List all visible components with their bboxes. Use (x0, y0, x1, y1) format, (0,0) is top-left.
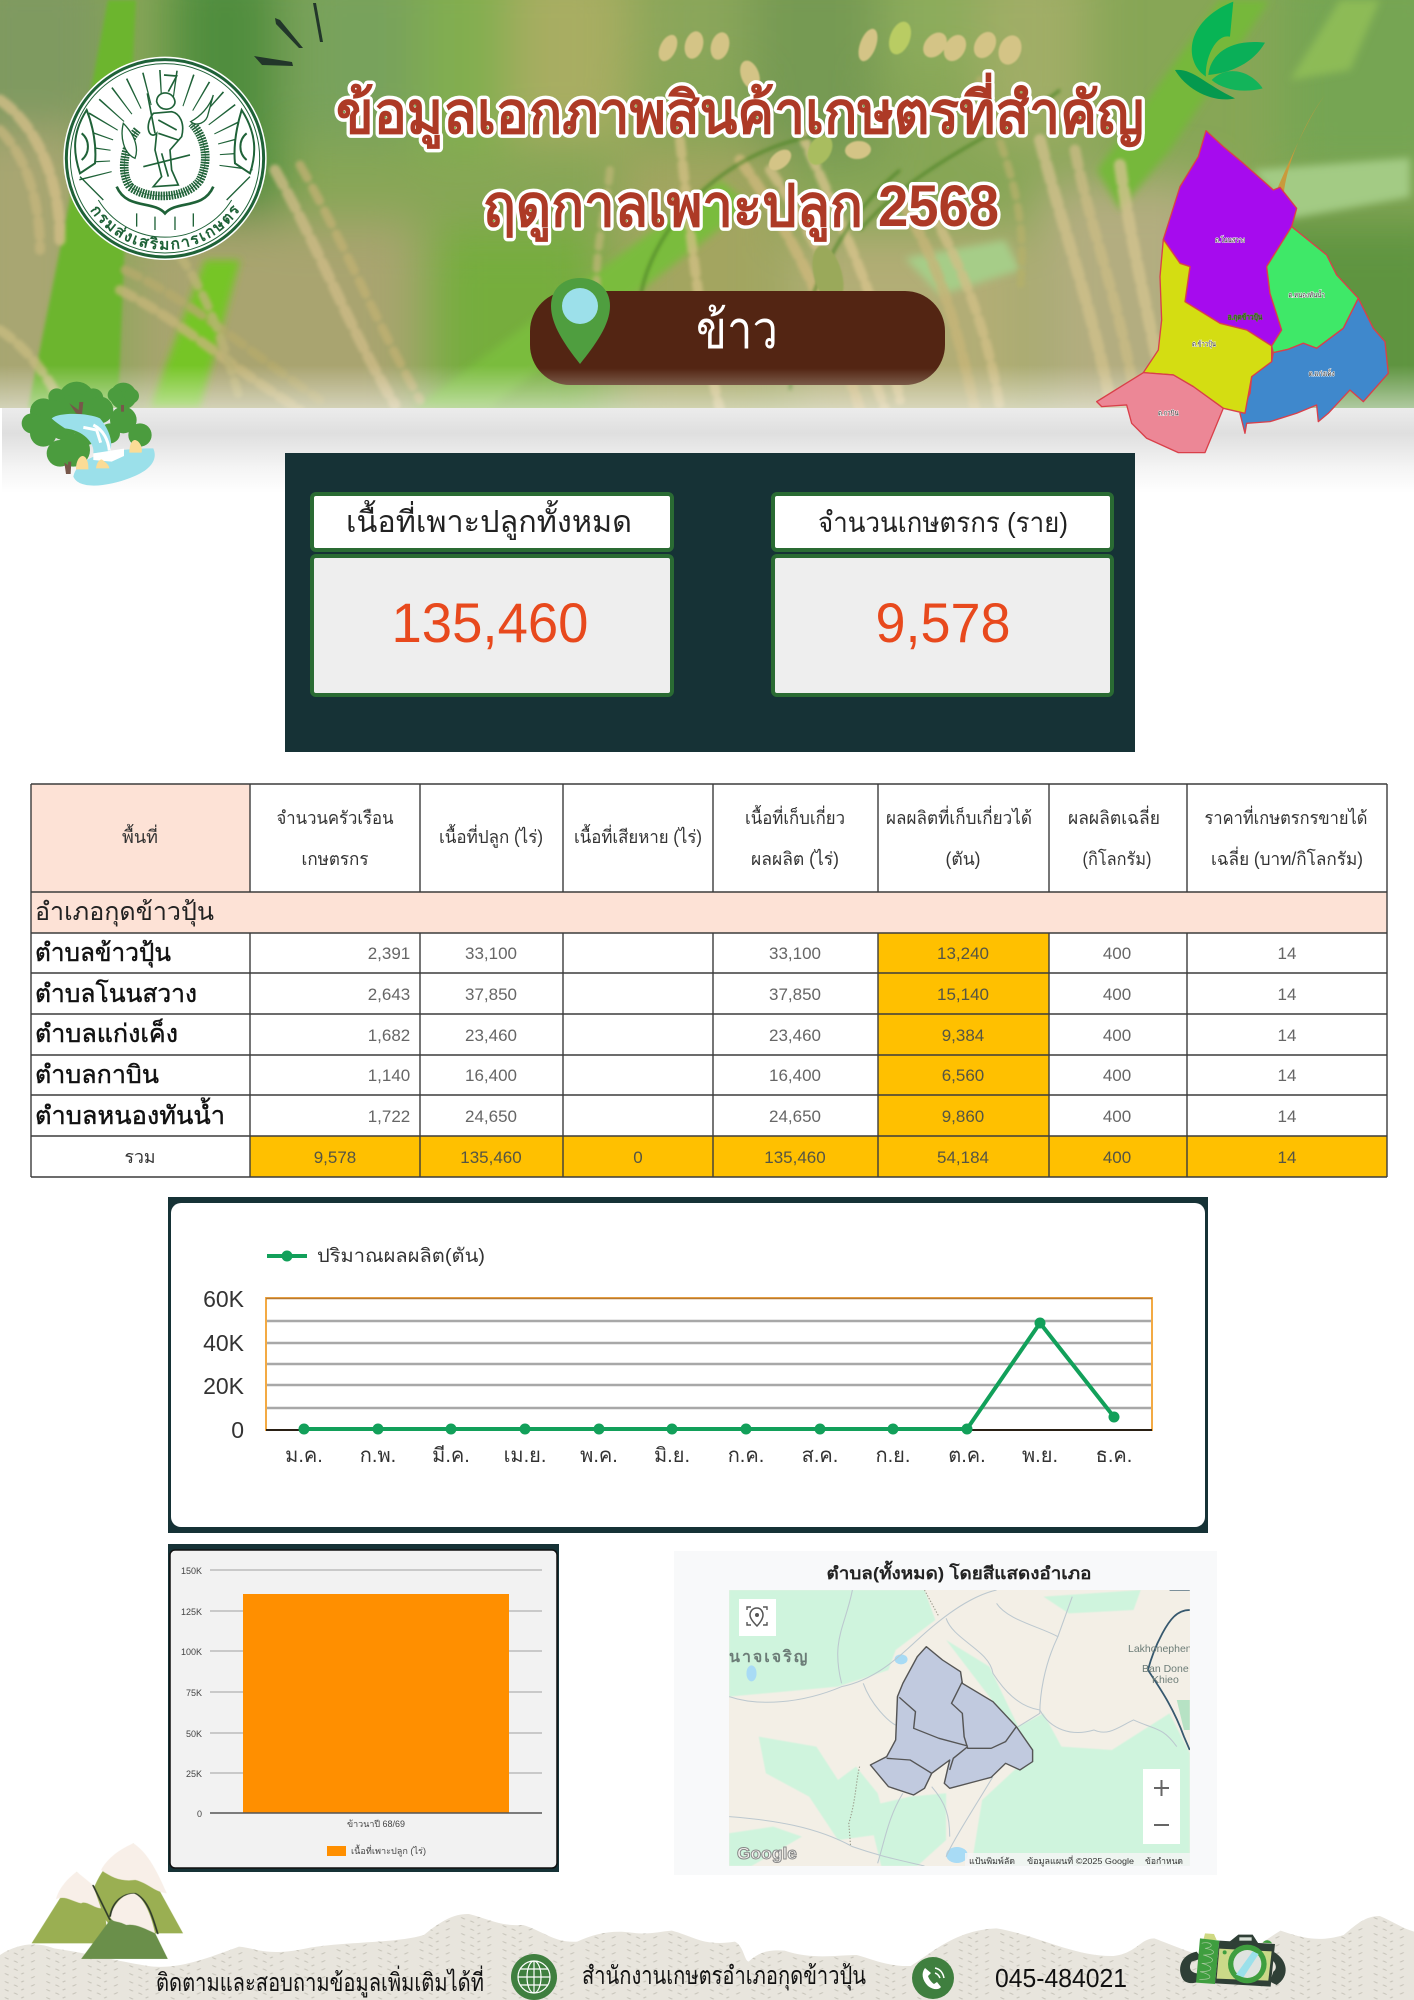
table values: 16,400 (465, 1066, 517, 1085)
table values: 37,850 (769, 985, 821, 1004)
footer: phone number: 045-484021 (995, 1963, 1127, 1993)
stat card: number of farmers (773, 494, 1112, 695)
icon: location pin (551, 278, 610, 364)
table row labels: ตำบลข้าวปุ้น (35, 939, 171, 968)
table values: 14 (1278, 985, 1296, 1004)
table values: 9,860 (942, 1107, 984, 1126)
chart line series (298, 1318, 1120, 1434)
map attribution (965, 1853, 1190, 1867)
map place labels: Ban Done (1142, 1663, 1189, 1675)
table values: 24,650 (769, 1107, 821, 1126)
stat card: total planted area: 135,460 (392, 591, 588, 654)
table values: 14 (1278, 1026, 1296, 1045)
footer: office name: สำนักงานเกษตรอำเภอกุดข้าวปุ้น (582, 1962, 866, 1991)
table values: 400 (1103, 1026, 1131, 1045)
chart month labels: ธ.ค. (1096, 1445, 1132, 1467)
chart month labels: ส.ค. (802, 1445, 838, 1467)
map: Kut Khaopun district subdistricts: ต.หนองทันน้ำ (1288, 290, 1325, 300)
table values: 13,240 (937, 944, 989, 963)
grey shaded band below photo (2, 408, 1414, 493)
table column headers: ผลผลิตที่เก็บเกี่ยวได้ (886, 805, 1032, 828)
table values: 0 (633, 1148, 643, 1167)
chart month labels: พ.ย. (1022, 1445, 1058, 1467)
table column headers: พื้นที่ (122, 824, 158, 847)
table values: 37,850 (465, 985, 517, 1004)
table values: 9,384 (942, 1026, 984, 1045)
bar chart axis labels (181, 1566, 202, 1819)
table values: 1,682 (368, 1026, 410, 1045)
panel: line chart monthly yield (168, 1197, 1208, 1533)
bar chart legend: เนื้อที่เพาะปลูก (ไร่) (351, 1844, 426, 1857)
table column headers: ราคาที่เกษตรกรขายได้ (1204, 805, 1368, 828)
table values: 14 (1278, 1066, 1296, 1085)
panel: summary statistics (285, 453, 1135, 752)
table column headers: เกษตรกร (302, 849, 369, 869)
map: Kut Khaopun district subdistricts (1097, 94, 1388, 453)
table values: 1,140 (368, 1066, 410, 1085)
table values: 1,722 (368, 1107, 410, 1126)
table values: 16,400 (769, 1066, 821, 1085)
table values: 23,460 (465, 1026, 517, 1045)
table column headers: เนื้อที่ปลูก (ไร่) (439, 824, 543, 848)
map: Kut Khaopun district subdistricts: ต.โนนสวาง (1215, 236, 1245, 245)
map attribution: ข้อมูลแผนที่ ©2025 Google (1027, 1855, 1134, 1867)
commodity label pill (530, 291, 945, 385)
bar chart axis labels: 75K (186, 1688, 202, 1698)
chart y axis labels: 0 (231, 1417, 244, 1443)
table values: 33,100 (769, 944, 821, 963)
map base (729, 1590, 1198, 1866)
map: Kut Khaopun district subdistricts: ต.แก่งเค็ง (1309, 368, 1335, 378)
title: two line heading (336, 72, 1144, 242)
table values: 135,460 (460, 1148, 522, 1167)
table values: 15,140 (937, 985, 989, 1004)
google logo: Google (737, 1844, 797, 1863)
icon: decorative black ticks (254, 3, 323, 66)
table column headers: เฉลี่ย (บาท/กิโลกรัม) (1211, 846, 1363, 869)
table values: 14 (1278, 1148, 1296, 1167)
table values: 400 (1103, 944, 1131, 963)
map: Kut Khaopun district subdistricts: ต.ข้าวปุ้น (1192, 340, 1216, 349)
panel: bar chart planted area (168, 1544, 559, 1872)
footer: hills background (0, 1914, 1414, 2000)
table values: 400 (1103, 1066, 1131, 1085)
chart y axis labels: 60K (203, 1286, 245, 1312)
table values (314, 944, 1296, 1167)
logo: Department of Agricultural Extension seal (63, 56, 267, 260)
logo: Department of Agricultural Extension seal: กรมส่งเสริมการเกษตร (90, 205, 239, 250)
table values: 2,643 (368, 985, 410, 1004)
table values: 6,560 (942, 1066, 984, 1085)
commodity label pill: ข้าว (696, 302, 778, 360)
header photo: rice field (0, 0, 1414, 450)
table row labels: ตำบลแก่งเค็ง (35, 1018, 178, 1048)
table values: 33,100 (465, 944, 517, 963)
stat card: number of farmers: 9,578 (876, 591, 1010, 654)
map district polygon (870, 1647, 1033, 1795)
table values: 135,460 (764, 1148, 826, 1167)
map place labels (730, 1644, 1190, 1683)
chart y axis labels: 40K (203, 1330, 245, 1356)
table column headers: ผลผลิต (ไร่) (751, 848, 839, 869)
bar chart axis labels: 100K (181, 1647, 202, 1657)
map attribution: ข้อกำหนด (1145, 1856, 1183, 1866)
panel: Google map (729, 1560, 1190, 1866)
chart month labels: ก.พ. (360, 1445, 396, 1467)
map place labels: นาจเจริญ (729, 1648, 809, 1667)
table values: 23,460 (769, 1026, 821, 1045)
table values: 14 (1278, 1107, 1296, 1126)
table column headers: จำนวนครัวเรือน (276, 808, 394, 828)
bar chart category label: ข้าวนาปี 68/69 (347, 1819, 405, 1829)
map attribution: แป้นพิมพ์ลัด (969, 1856, 1015, 1866)
table values: 400 (1103, 985, 1131, 1004)
bar chart axis labels: 0 (197, 1809, 202, 1819)
icon: phone (912, 1957, 954, 1999)
title: two line heading: ข้อมูลเอกภาพสินค้าเกษตรที่สำคัญ (336, 72, 1144, 149)
map location control (739, 1599, 776, 1636)
chart month labels: มิ.ย. (654, 1445, 690, 1467)
table row labels: ตำบลโนนสวาง (35, 979, 197, 1008)
table row labels: ตำบลหนองทันน้ำ (35, 1097, 225, 1130)
chart gridlines (266, 1298, 1152, 1430)
icon: camera (1180, 1933, 1286, 1987)
table values: 400 (1103, 1148, 1131, 1167)
title: two line heading: ฤดูกาลเพาะปลูก 2568 (483, 174, 999, 242)
stat card: number of farmers: จำนวนเกษตรกร (ราย) (818, 507, 1068, 538)
table column headers: (ตัน) (946, 849, 980, 869)
chart month labels: มี.ค. (432, 1445, 470, 1467)
map: Kut Khaopun district subdistricts: ต.กาบิน (1158, 408, 1179, 417)
footer: follow-up text: ติดตามและสอบถามข้อมูลเพิ่มเติมได้ที่ (156, 1965, 484, 1998)
icon: globe (511, 1954, 557, 2000)
map: Kut Khaopun district subdistricts: อ.กุดข้าวปุ้น (1228, 312, 1262, 321)
table values: 14 (1278, 944, 1296, 963)
table row labels: รวม (124, 1147, 156, 1167)
chart month labels: ต.ค. (948, 1445, 986, 1467)
icon: snowy mountains (32, 1843, 183, 1959)
table values: 24,650 (465, 1107, 517, 1126)
table column headers (122, 805, 1368, 869)
chart month labels: ก.ค. (728, 1445, 764, 1467)
chart month labels (285, 1445, 1132, 1467)
chart month labels: ก.ย. (876, 1445, 910, 1467)
bar chart axis labels: 50K (186, 1729, 202, 1739)
table values: 54,184 (937, 1148, 989, 1167)
table column headers: เนื้อที่เก็บเกี่ยว (745, 805, 845, 828)
chart y axis labels (203, 1286, 245, 1443)
table column headers: (กิโลกรัม) (1082, 848, 1152, 869)
map place labels: Lakhonepheng (1128, 1643, 1198, 1655)
chart legend: ปริมาณผลผลิต(ตัน) (317, 1246, 485, 1267)
table row labels (35, 898, 225, 1167)
map title: ตำบล(ทั้งหมด) โดยสีแสดงอำเภอ (826, 1560, 1092, 1583)
bar chart axis labels: 150K (181, 1566, 202, 1576)
stat card: total planted area: เนื้อที่เพาะปลูกทั้งหมด (346, 500, 632, 540)
stat card: total planted area (312, 494, 672, 695)
table values: 9,578 (314, 1148, 356, 1167)
bar chart gridlines (210, 1570, 542, 1773)
map place labels: Khieo (1152, 1674, 1179, 1686)
chart month labels: ม.ค. (285, 1445, 323, 1467)
table row labels: อำเภอกุดข้าวปุ้น (35, 898, 214, 927)
bar chart legend (327, 1844, 426, 1857)
data table (31, 784, 1387, 1177)
chart y axis labels: 20K (203, 1373, 245, 1399)
bar chart axis labels: 25K (186, 1769, 202, 1779)
map zoom controls (1143, 1769, 1180, 1844)
table values: 2,391 (368, 944, 410, 963)
chart month labels: เม.ย. (504, 1445, 546, 1467)
bar: planted area (243, 1594, 509, 1813)
bar chart axis labels: 125K (181, 1607, 202, 1617)
icon: waterfall and trees (22, 382, 155, 486)
chart month labels: พ.ค. (580, 1445, 618, 1467)
table row labels: ตำบลกาบิน (35, 1061, 159, 1089)
table column headers: เนื้อที่เสียหาย (ไร่) (574, 824, 702, 847)
table column headers: ผลผลิตเฉลี่ย (1068, 805, 1160, 828)
table header cell fill and section row (31, 784, 1387, 933)
table values: 400 (1103, 1107, 1131, 1126)
icon: green leaf (1175, 2, 1265, 99)
